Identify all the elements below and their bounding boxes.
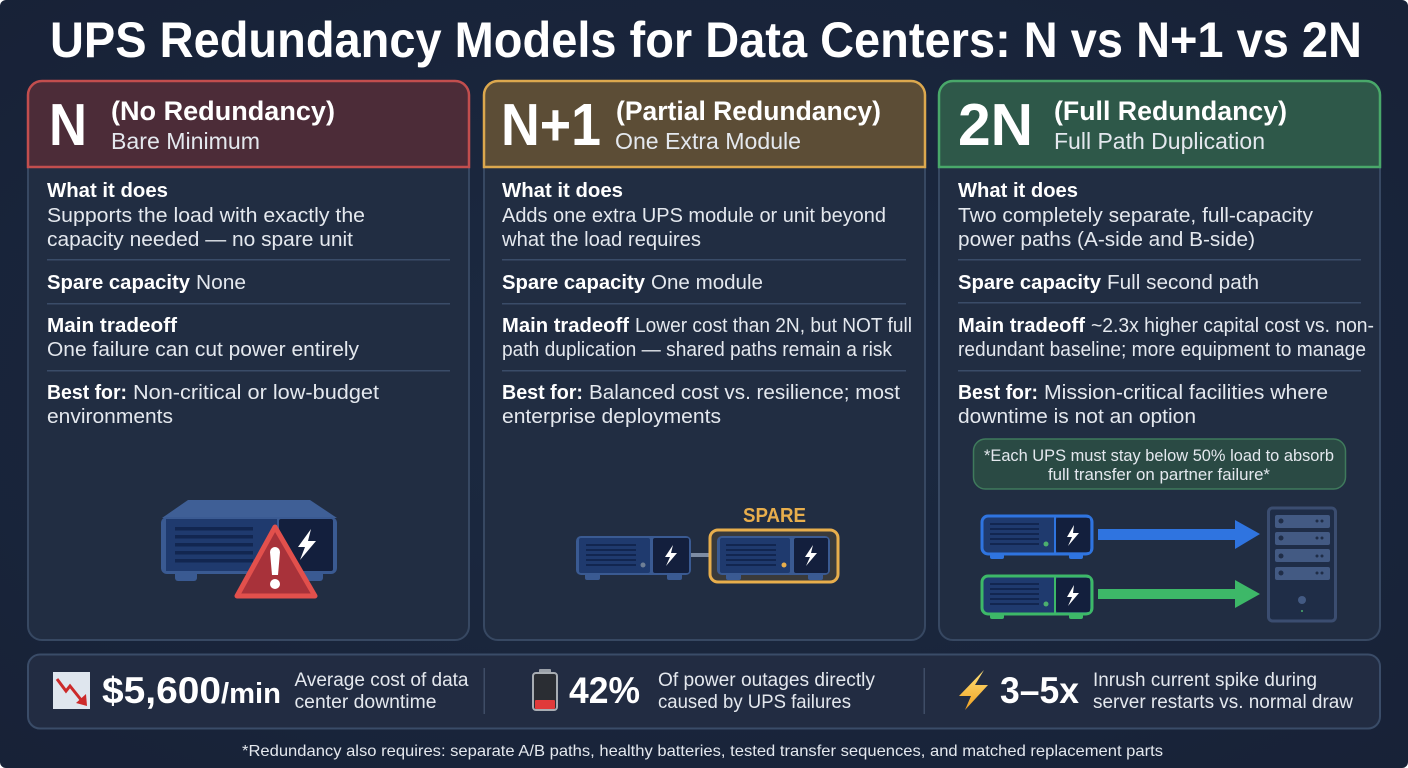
text block: what it does: Adds one extra UPS module or unit beyond	[502, 205, 886, 227]
stat: UPS failures: 42%	[569, 670, 640, 711]
icon: lightning bolt	[959, 670, 988, 710]
text block: what it does: What it does	[958, 180, 1078, 202]
stat: UPS failures	[533, 669, 875, 713]
icon: green B-side UPS	[982, 576, 1092, 619]
text block: spare capacity: One module	[651, 272, 763, 294]
text block: main tradeoff: Main tradeoff	[47, 315, 177, 337]
arrow: blue path to server	[1098, 520, 1260, 549]
panel: N+1 partial redundancy	[484, 81, 925, 640]
icon: primary UPS module	[576, 536, 691, 580]
stats bar	[28, 654, 1380, 728]
text block: best for	[958, 382, 1328, 428]
text block: what it does: what the load requires	[501, 229, 701, 251]
stat: inrush current: 3–5x	[1000, 670, 1079, 711]
text block: what it does: capacity needed — no spare unit	[47, 229, 353, 251]
icon: low battery	[533, 669, 557, 710]
stat: downtime cost: /min	[221, 678, 281, 710]
stat: inrush current: Inrush current spike during	[1093, 670, 1317, 691]
text block: main tradeoff: One failure can cut power entirely	[47, 339, 359, 361]
stat: inrush current	[959, 670, 1353, 713]
text block: main tradeoff: Main tradeoff	[958, 315, 1085, 337]
callout: 50% load note: *Each UPS must stay below 50% load to absorb	[984, 446, 1334, 465]
text block: best for: enterprise deployments	[502, 406, 721, 428]
text block: best for: Balanced cost vs. resilience; most	[589, 382, 900, 404]
text block: what it does	[501, 180, 886, 251]
stat: downtime cost: center downtime	[294, 692, 436, 713]
header: N: (No Redundancy)	[111, 96, 335, 126]
header: N: N	[49, 92, 87, 158]
header: N+1: (Partial Redundancy)	[616, 96, 881, 126]
icon: spare UPS module	[710, 530, 838, 582]
text block: main tradeoff: path duplication — shared paths remain a risk	[502, 339, 893, 361]
text block: spare capacity	[958, 272, 1259, 294]
panel: N no redundancy	[28, 81, 469, 640]
stat: UPS failures: Of power outages directly	[658, 670, 875, 691]
text block: main tradeoff: redundant baseline; more equipment to manage	[958, 339, 1366, 361]
text block: what it does: What it does	[502, 180, 623, 202]
icon: blue A-side UPS	[982, 516, 1092, 559]
text block: what it does	[47, 180, 365, 251]
text block: spare capacity: Spare capacity	[502, 272, 646, 294]
text block: what it does: Supports the load with exactly the	[47, 205, 365, 227]
label: SPARE: SPARE	[743, 505, 806, 527]
footnote: *Redundancy also requires: separate A/B paths, healthy batteries, tested transfer sequences, and matched replacement parts	[242, 743, 1163, 760]
text block: spare capacity: Full second path	[1107, 272, 1259, 294]
header: N+1: One Extra Module	[615, 128, 801, 154]
text block: what it does: What it does	[47, 180, 168, 202]
text block: main tradeoff	[502, 315, 912, 361]
text block: main tradeoff: Main tradeoff	[502, 315, 629, 337]
text block: spare capacity: Spare capacity	[958, 272, 1102, 294]
text block: best for	[47, 382, 379, 428]
stat: downtime cost	[53, 670, 469, 713]
text block: best for: downtime is not an option	[958, 406, 1196, 428]
header: N	[28, 81, 469, 167]
text block: best for: environments	[47, 406, 173, 428]
text block: best for	[502, 382, 900, 428]
text block: spare capacity	[502, 272, 763, 294]
text block: what it does: Two completely separate, full-capacity	[958, 205, 1313, 227]
icon: server rack	[1268, 508, 1336, 621]
text block: spare capacity: None	[196, 272, 246, 294]
stat: UPS failures: caused by UPS failures	[658, 692, 851, 713]
callout: 50% load note: full transfer on partner failure*	[1048, 465, 1270, 484]
arrow: green path to server	[1098, 580, 1260, 608]
text block: best for: Best for:	[502, 382, 583, 404]
header: N+1	[484, 81, 925, 167]
icon: two UPS modules with spare	[576, 505, 838, 582]
icon: falling chart	[53, 672, 90, 709]
text block: best for: Non-critical or low-budget	[133, 382, 379, 404]
stat: downtime cost: $5,600	[102, 670, 221, 711]
header: 2N	[939, 81, 1380, 167]
title: UPS Redundancy Models for Data Centers: N vs N+1 vs 2N	[50, 12, 1362, 68]
text block: main tradeoff: Lower cost than 2N, but NOT full	[635, 315, 912, 337]
header: 2N: 2N	[958, 92, 1033, 158]
panel: 2N full redundancy	[939, 81, 1380, 640]
header: N+1: N+1	[501, 92, 601, 158]
icon: UPS unit with warning triangle	[161, 500, 337, 596]
text block: what it does: power paths (A-side and B-side)	[958, 229, 1255, 251]
text block: best for: Best for:	[47, 382, 127, 404]
text block: what it does	[958, 180, 1313, 251]
header: 2N: (Full Redundancy)	[1054, 96, 1287, 126]
callout: 50% load note	[974, 439, 1346, 489]
stat: inrush current: server restarts vs. normal draw	[1093, 692, 1353, 713]
text block: best for: Mission-critical facilities where	[1044, 382, 1328, 404]
text block: main tradeoff	[47, 315, 359, 361]
stat: downtime cost: Average cost of data	[294, 670, 469, 691]
text block: best for: Best for:	[958, 382, 1038, 404]
text block: main tradeoff: ~2.3x higher capital cost vs. non-	[1091, 315, 1374, 337]
header: 2N: Full Path Duplication	[1054, 128, 1265, 154]
header: N: Bare Minimum	[111, 128, 260, 154]
text block: main tradeoff	[958, 315, 1374, 361]
text block: spare capacity: Spare capacity	[47, 272, 191, 294]
